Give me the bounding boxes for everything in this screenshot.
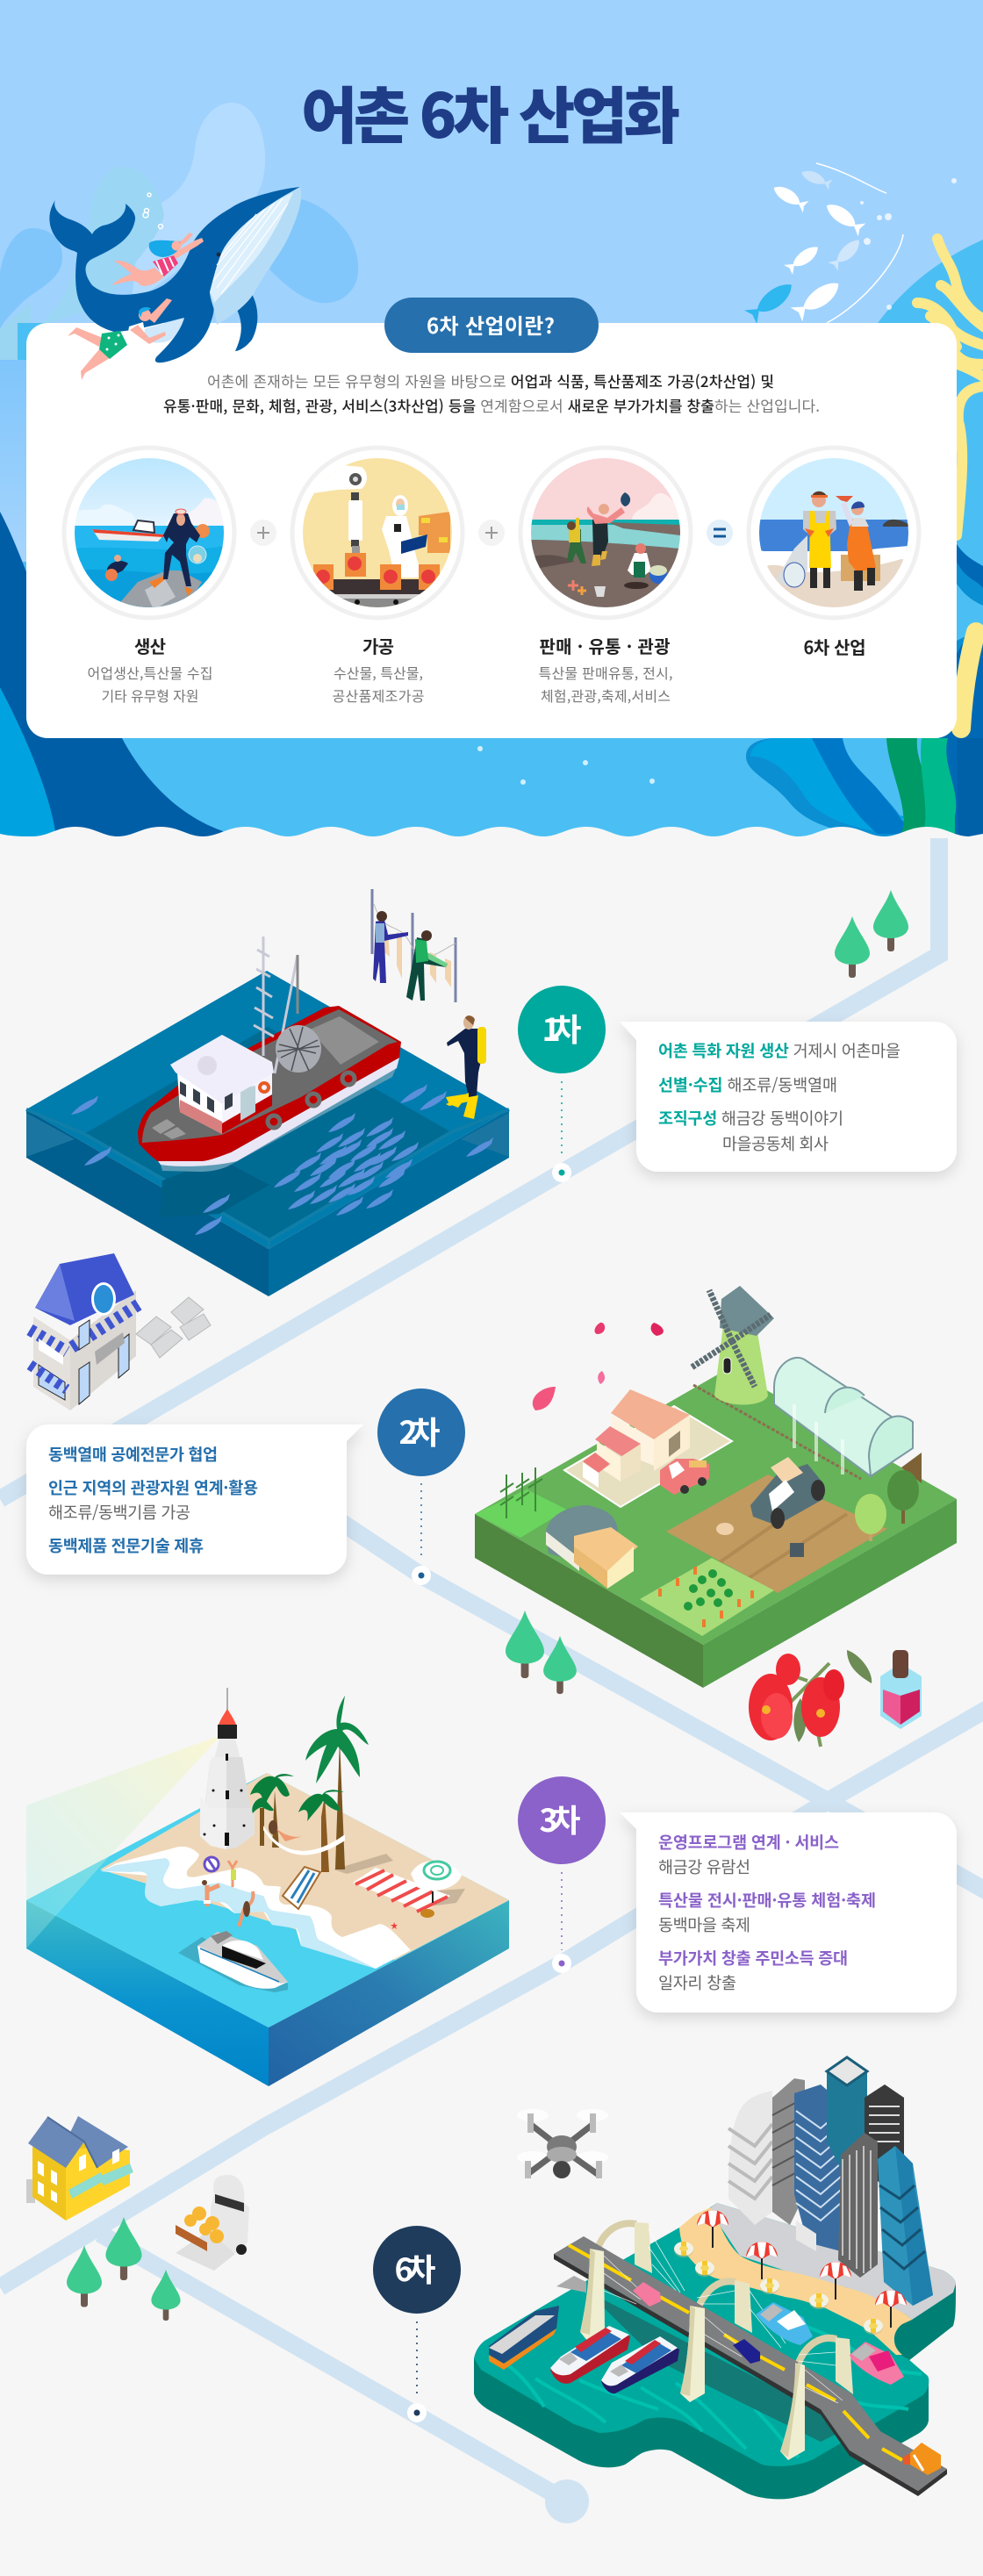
illustration: yellow house bbox=[26, 2116, 133, 2221]
farm right side bbox=[703, 1499, 957, 1688]
block right side bbox=[269, 1109, 509, 1296]
panel: what is 6th industry card bbox=[26, 298, 957, 738]
step 3 bubble bbox=[620, 1812, 957, 2013]
grass patch bbox=[475, 1489, 567, 1538]
labels: 기타 유무형 자원 bbox=[102, 685, 198, 706]
lifebuoys bbox=[674, 2242, 883, 2335]
step 6 badge: 6차 bbox=[395, 2245, 435, 2291]
labels: 가공 bbox=[362, 633, 394, 658]
bridge road bbox=[554, 2236, 947, 2496]
surf white bbox=[101, 1847, 411, 1969]
left column bbox=[0, 303, 31, 562]
trees near step 1 bbox=[835, 890, 908, 978]
fish bbox=[71, 1084, 493, 1235]
block top bbox=[26, 971, 509, 1249]
background blob: left bbox=[0, 228, 62, 329]
pill heading: 6차 산업이란? bbox=[427, 309, 555, 340]
step 1 bubble: 마을공동체 회사 bbox=[722, 1132, 829, 1155]
right side dark kelp bbox=[913, 544, 983, 847]
step 3 bubble: 운영프로그램 연계 · 서비스 bbox=[658, 1831, 839, 1854]
pink cruise ship bbox=[850, 2342, 904, 2385]
illustration: farm block bbox=[475, 1286, 957, 1688]
operator: plus bbox=[250, 520, 276, 546]
pig and pot bbox=[716, 1523, 804, 1557]
ship cabin bbox=[177, 1073, 222, 1134]
bubbles bbox=[477, 178, 957, 785]
sand bbox=[679, 2207, 912, 2355]
ship bbox=[138, 936, 401, 1172]
girl swimmer bbox=[111, 233, 204, 286]
sand bbox=[100, 1773, 509, 1960]
left dark kelp shape bbox=[0, 512, 228, 847]
step 2 connector bbox=[412, 1483, 431, 1585]
step 2 badge bbox=[377, 1388, 465, 1476]
palm trees bbox=[250, 1696, 369, 1872]
background blob: pale column bbox=[132, 103, 265, 303]
illustration: port city bbox=[474, 2057, 956, 2499]
ferry bbox=[489, 2306, 559, 2370]
labels: 생산 bbox=[134, 633, 166, 658]
ship masts bbox=[254, 936, 298, 1073]
cars bbox=[633, 2282, 760, 2364]
farmhouse bbox=[564, 1389, 732, 1507]
lower ocean bbox=[18, 240, 983, 847]
step 2 bubble: 동백열매 공예전문가 협업 bbox=[48, 1443, 218, 1466]
left light kelp shape bbox=[0, 687, 55, 847]
robot bbox=[176, 2175, 249, 2271]
step 3 connector bbox=[552, 1872, 571, 1973]
step 1 connector bbox=[552, 1081, 571, 1182]
description text: 어촌에 존재하는 모든 유무형의 자원을 바탕으로 어업과 식품, 특산품제조 가공(2차산업) 및 bbox=[207, 370, 774, 391]
circle: 판매 유통 관광 bbox=[520, 448, 691, 618]
navy cargo ship bbox=[601, 2336, 679, 2393]
island base bbox=[474, 2282, 956, 2499]
red cargo ship bbox=[550, 2326, 630, 2384]
water bbox=[26, 1773, 509, 2027]
pill heading bbox=[384, 298, 599, 353]
whale body bbox=[49, 187, 300, 362]
lighthouse bbox=[200, 1688, 255, 1849]
illustration: shop building bbox=[30, 1253, 140, 1410]
step 1 bubble: 조직구성 해금강 동백이야기 bbox=[658, 1107, 843, 1130]
workers drying fish bbox=[372, 889, 456, 1002]
labels bbox=[88, 633, 865, 706]
umbrellas bbox=[697, 2210, 907, 2328]
circle: 가공 bbox=[292, 448, 463, 618]
step 3 bubble: 동백마을 축제 bbox=[658, 1913, 750, 1936]
step 1 bubble: 어촌 특화 자원 생산 거제시 어촌마을 bbox=[658, 1039, 900, 1062]
front bridge pylons bbox=[580, 2249, 843, 2460]
bridge shadow bbox=[556, 2276, 586, 2293]
wave divider bbox=[0, 827, 983, 856]
air bubbles bbox=[143, 193, 163, 228]
step 1 badge: 1차 bbox=[542, 1005, 581, 1051]
pink truck bbox=[660, 1459, 709, 1495]
illustration: beach block bbox=[26, 1688, 509, 2086]
background blob: behind whale bbox=[269, 199, 358, 303]
speedboat bbox=[178, 1931, 288, 1992]
circle: 6차 산업 bbox=[749, 448, 919, 618]
cosmetic bottle bbox=[880, 1650, 922, 1729]
beach right side bbox=[269, 1900, 509, 2086]
deck chair bbox=[283, 1867, 320, 1909]
trees near farm bbox=[506, 1611, 577, 1694]
light beam bbox=[26, 1735, 221, 1948]
background blob: aqua bbox=[35, 167, 164, 329]
block left side bbox=[26, 1109, 269, 1296]
description text: 유통·판매, 문화, 체험, 관광, 서비스(3차산업) 등을 연계함으로서 새로운 부가가치를 창출하는 산업입니다. bbox=[163, 394, 820, 416]
palm shadow and towel bbox=[334, 1854, 465, 1912]
whale belly bbox=[210, 187, 301, 325]
header ocean background bbox=[0, 0, 983, 856]
camellia flowers bbox=[749, 1650, 872, 1747]
step 3 badge bbox=[518, 1776, 606, 1864]
labels: 특산물 판매유통, 전시, bbox=[539, 662, 672, 683]
circle: 생산 bbox=[64, 448, 234, 618]
hammock bbox=[263, 1820, 345, 1855]
drone bbox=[517, 2109, 608, 2178]
labels: 6차 산업 bbox=[804, 634, 865, 659]
ship net bbox=[276, 1025, 321, 1073]
green truck bbox=[750, 1457, 825, 1529]
greenhouse bbox=[774, 1358, 913, 1476]
labels: 수산물, 특산물, bbox=[334, 662, 423, 683]
water surface bbox=[474, 2203, 956, 2466]
buildings bbox=[728, 2057, 933, 2306]
operator: plus bbox=[478, 520, 505, 546]
step 2 badge: 2차 bbox=[398, 1408, 441, 1453]
vegetable patch bbox=[640, 1558, 774, 1636]
step 1 badge bbox=[518, 986, 606, 1073]
rear bridge pylons bbox=[598, 2222, 853, 2394]
step 3 badge: 3차 bbox=[539, 1796, 581, 1841]
step 1 bubble: 선별·수집 해조류/동백열매 bbox=[658, 1073, 837, 1096]
step 2 bubble: 해조류/동백기름 가공 bbox=[48, 1501, 190, 1524]
yellow coral bbox=[907, 239, 983, 728]
farm trees bbox=[855, 1470, 919, 1541]
labels: 판매 · 유통 · 관광 bbox=[539, 633, 671, 658]
step 3 bubble: 해금강 유람선 bbox=[658, 1855, 750, 1878]
step 3 bubble: 부가가치 창출 주민소득 증대 bbox=[658, 1947, 848, 1970]
labels: 체험,관광,축제,서비스 bbox=[541, 685, 671, 706]
farm left side bbox=[475, 1514, 703, 1688]
fish lines bbox=[816, 163, 903, 323]
road lines bbox=[0, 838, 983, 2501]
umbrella bbox=[411, 1861, 462, 1918]
step 2 bubble: 인근 지역의 관광자원 연계·활용 bbox=[48, 1476, 258, 1499]
step 6 connector bbox=[407, 2321, 427, 2422]
seaweed blue bbox=[746, 738, 909, 838]
step 1 bubble bbox=[620, 1022, 957, 1172]
seaweed green bbox=[886, 738, 931, 838]
illustration: fishing block bbox=[26, 936, 509, 1296]
farm top bbox=[475, 1368, 957, 1645]
blue cruise ship bbox=[756, 2302, 813, 2345]
field bbox=[666, 1475, 887, 1593]
star bbox=[391, 1922, 398, 1929]
step 2 bubble bbox=[26, 1424, 363, 1575]
road end circle bbox=[545, 2479, 589, 2523]
step 2 bubble: 동백제품 전문기술 제휴 bbox=[48, 1534, 204, 1557]
petals bbox=[533, 1323, 664, 1410]
pavement bbox=[711, 2203, 956, 2320]
fence bbox=[693, 1385, 861, 1479]
whale illustration bbox=[49, 187, 301, 380]
fish school bbox=[744, 168, 867, 325]
truck bbox=[902, 2443, 941, 2475]
surf light bbox=[101, 1858, 376, 1969]
barn bbox=[546, 1505, 638, 1589]
illustration: packaged goods bbox=[136, 1297, 211, 1358]
whale small flipper bbox=[143, 318, 184, 343]
operator: equals bbox=[707, 520, 733, 546]
windmill bbox=[692, 1286, 774, 1404]
beach left side bbox=[26, 1900, 269, 2086]
step 6 badge bbox=[373, 2226, 461, 2314]
beach ball and swimmers bbox=[202, 1857, 253, 1927]
diver bbox=[446, 1015, 486, 1119]
labels: 어업생산,특산물 수집 bbox=[88, 662, 212, 683]
step 3 bubble: 일자리 창출 bbox=[658, 1971, 736, 1994]
step 3 bubble: 특산물 전시·판매·유통 체험·축제 bbox=[658, 1889, 876, 1912]
labels: 공산품제조가공 bbox=[332, 685, 425, 706]
whale side fin bbox=[235, 294, 257, 351]
description text bbox=[163, 370, 820, 416]
trees near yellow house bbox=[67, 2217, 181, 2321]
title: 어촌 6차 산업화 bbox=[301, 68, 680, 156]
boy swimmer bbox=[68, 298, 172, 380]
plants bbox=[500, 1467, 542, 1518]
